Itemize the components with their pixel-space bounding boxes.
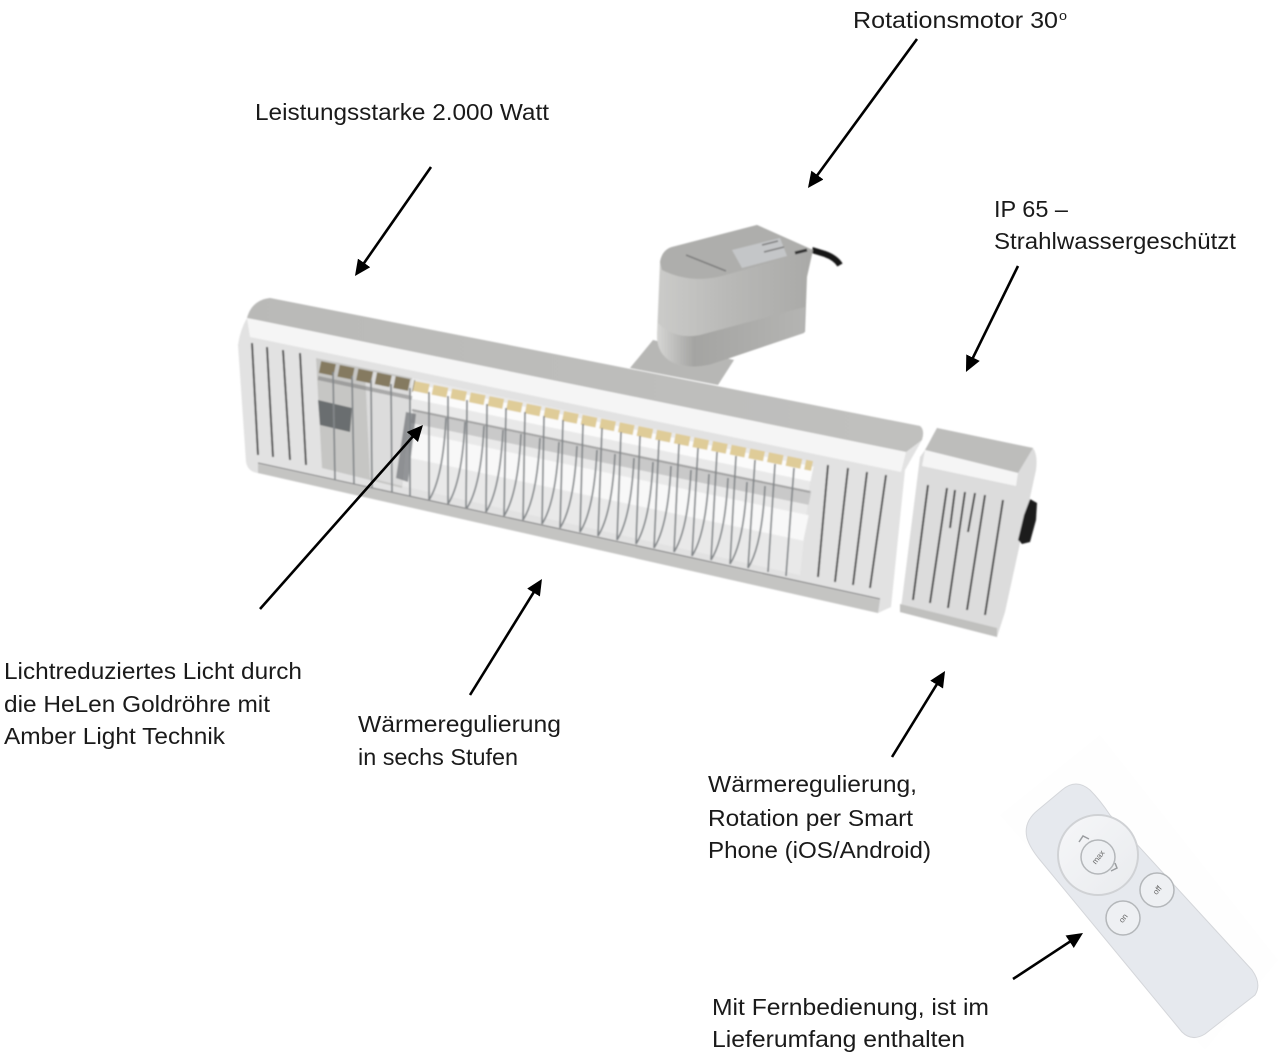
connector rod <box>905 438 930 443</box>
mounting bracket <box>630 340 734 385</box>
label: amber light: Amber Light Technik <box>4 723 226 749</box>
rotation motor <box>657 225 813 367</box>
on button <box>1106 901 1140 935</box>
wheel arrows <box>1079 836 1117 871</box>
on button: on <box>1117 912 1130 925</box>
off button <box>1140 873 1174 907</box>
remote control <box>1000 735 1278 1050</box>
label: rotation motor: Rotationsmotor 30 <box>853 7 1058 33</box>
label: smartphone control: Wärmeregulierung, <box>708 771 917 797</box>
max button: max <box>1090 849 1107 866</box>
max button <box>1081 840 1115 874</box>
off button: off <box>1151 883 1164 897</box>
amber heat tube <box>320 367 812 466</box>
label: amber light: die HeLen Goldröhre mit <box>4 691 271 717</box>
reflector <box>316 358 812 575</box>
remote backdrop <box>1000 735 1278 1050</box>
label: remote control: Mit Fernbedienung, ist im <box>712 994 989 1020</box>
arrow: heat regulation <box>470 584 539 695</box>
label: smartphone control: Phone (iOS/Android) <box>708 837 931 863</box>
arrow: power <box>358 167 431 271</box>
label: smartphone control: Rotation per Smart <box>708 805 914 831</box>
label: IP 65: IP 65 – <box>994 196 1068 222</box>
control knob <box>1018 499 1037 544</box>
white strip <box>247 318 906 472</box>
label: remote control <box>712 994 989 1052</box>
label: heat regulation <box>358 711 561 770</box>
remote body <box>1026 784 1258 1038</box>
label: heat regulation: in sechs Stufen <box>358 744 518 770</box>
label: rotation motor: o <box>1059 8 1067 23</box>
label: amber light: Lichtreduziertes Licht durch <box>4 658 302 684</box>
top gray panel <box>247 298 923 452</box>
arrow: motor <box>812 39 917 183</box>
label: smartphone control <box>708 771 931 863</box>
bottom rail <box>258 464 880 613</box>
heater product illustration <box>238 225 1037 637</box>
label: amber light <box>4 658 302 749</box>
label: remote control: Lieferumfang enthalten <box>712 1026 965 1052</box>
main housing <box>238 298 923 613</box>
cable <box>812 250 840 265</box>
arrow: smartphone control <box>892 676 942 757</box>
control box <box>900 428 1037 637</box>
left and right vent slots <box>252 343 886 588</box>
label: heat regulation: Wärmeregulierung <box>358 711 561 737</box>
arrow: remote control <box>1013 936 1078 979</box>
control box vent slots <box>913 485 1003 615</box>
arrow: amber light tube <box>260 430 419 609</box>
label: IP 65 <box>994 196 1237 254</box>
arrow: IP 65 <box>969 266 1018 367</box>
mirror reflection <box>318 378 416 482</box>
label: power: Leistungsstarke 2.000 Watt <box>255 99 550 125</box>
control wheel <box>1058 815 1138 895</box>
wire grill <box>333 372 794 576</box>
label: IP 65: Strahlwassergeschützt <box>994 228 1237 254</box>
